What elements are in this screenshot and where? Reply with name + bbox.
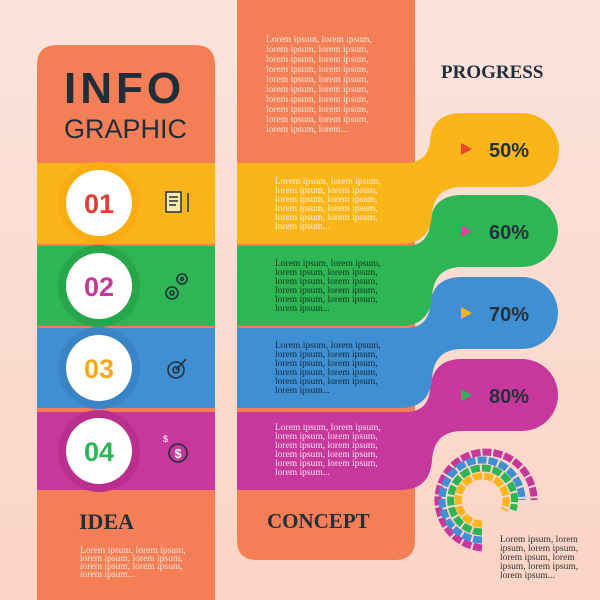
band: yellow 01: [37, 113, 559, 244]
band: blue 03: lorem ipsum, lorem ipsum,: [275, 350, 378, 360]
text block: idea: lorem ipsum...: [80, 570, 135, 580]
band: green 02: lorem ipsum, lorem ipsum,: [275, 286, 378, 296]
text block: chart caption: ipsum, lorem ipsum,: [500, 562, 578, 572]
heading: CONCEPT: CONCEPT: [267, 509, 370, 533]
icon: dollar coin: [163, 434, 187, 462]
band: yellow 01: lorem ipsum, lorem ipsum,: [275, 195, 378, 205]
band: blue 03: lorem ipsum, lorem ipsum,: [275, 368, 378, 378]
band: green 02: lorem ipsum, lorem ipsum,: [275, 277, 378, 287]
text block: concept top: lorem ipsum, lorem ipsum,: [266, 95, 369, 105]
band: purple 04: 80%: [489, 386, 529, 408]
text block: concept top: lorem ipsum, lorem ipsum,: [266, 115, 369, 125]
badge: 03: [58, 327, 140, 409]
band: yellow 01: 50%: [489, 140, 529, 162]
band: green 02: [37, 195, 558, 326]
band: green 02: 60%: [489, 222, 529, 244]
badge: 03: 03: [84, 354, 114, 384]
panel: left idea column: [37, 45, 215, 600]
band: blue 03: lorem ipsum, lorem ipsum,: [275, 377, 378, 387]
text block: chart caption: lorem ipsum, lorem: [500, 553, 575, 563]
band: purple 04: lorem ipsum, lorem ipsum,: [275, 441, 378, 451]
badge: 01: [58, 162, 140, 244]
text block: concept top: lorem ipsum, lorem ipsum,: [266, 105, 369, 115]
band: purple 04: lorem ipsum...: [275, 468, 330, 478]
band: blue 03: lorem ipsum, lorem ipsum,: [275, 359, 378, 369]
text block: concept top: lorem ipsum, lorem...: [266, 125, 348, 135]
band: blue 03: 70%: [489, 304, 529, 326]
band: green 02: lorem ipsum...: [275, 304, 330, 314]
band: yellow 01: lorem ipsum, lorem ipsum,: [275, 186, 378, 196]
icon: dollar coin: $: [163, 434, 168, 444]
title: INFO GRAPHIC: [64, 64, 187, 144]
band: green 02: lorem ipsum, lorem ipsum,: [275, 295, 378, 305]
band: yellow 01: lorem ipsum, lorem ipsum,: [275, 213, 378, 223]
band: blue 03: [37, 277, 558, 408]
badge: 04: [58, 410, 140, 492]
icon: gears: [166, 274, 187, 299]
band: purple 04: Lorem ipsum, lorem ipsum,: [275, 423, 381, 433]
text block: chart caption: Lorem ipsum, lorem: [500, 535, 578, 545]
text block: idea: lorem ipsum, lorem ipsum,: [80, 554, 183, 564]
chart: radial progress: [438, 452, 534, 548]
band: blue 03: lorem ipsum...: [275, 386, 330, 396]
text block: concept top: Lorem ipsum, lorem ipsum,: [266, 35, 372, 45]
title: INFO GRAPHIC: INFO: [64, 64, 185, 113]
band: green 02: lorem ipsum, lorem ipsum,: [275, 268, 378, 278]
band: blue 03: Lorem ipsum, lorem ipsum,: [275, 341, 381, 351]
text block: idea: lorem ipsum, lorem ipsum,: [80, 562, 183, 572]
text block: concept top: lorem ipsum, lorem ipsum,: [266, 75, 369, 85]
badge: 04: 04: [84, 437, 114, 467]
title: INFO GRAPHIC: GRAPHIC: [64, 114, 187, 144]
icon: dollar coin: $: [174, 446, 182, 461]
icon: target: [168, 359, 186, 378]
text block: concept top: lorem ipsum, lorem ipsum,: [266, 55, 369, 65]
badge: 02: [58, 245, 140, 327]
icon: document: [166, 192, 188, 212]
band: purple 04: lorem ipsum, lorem ipsum,: [275, 450, 378, 460]
text block: concept top: lorem ipsum, lorem ipsum,: [266, 45, 369, 55]
badge: 01: 01: [84, 189, 114, 219]
text block: chart caption: lorem ipsum...: [500, 571, 555, 581]
panel: middle concept column: [237, 0, 415, 560]
band: green 02: Lorem ipsum, lorem ipsum,: [275, 259, 381, 269]
text block: concept top: lorem ipsum, lorem ipsum,: [266, 85, 369, 95]
band: purple 04: lorem ipsum, lorem ipsum,: [275, 459, 378, 469]
heading: IDEA: IDEA: [79, 509, 134, 534]
text block: idea: Lorem ipsum, lorem ipsum,: [80, 546, 186, 556]
heading: PROGRESS: PROGRESS: [441, 62, 543, 83]
band: purple 04: [37, 359, 558, 490]
band: purple 04: lorem ipsum, lorem ipsum,: [275, 432, 378, 442]
band: yellow 01: Lorem ipsum, lorem ipsum,: [275, 177, 381, 187]
text block: concept top: lorem ipsum, lorem ipsum,: [266, 65, 369, 75]
text block: chart caption: ipsum, lorem ipsum,: [500, 544, 578, 554]
badge: 02: 02: [84, 272, 114, 302]
band: yellow 01: lorem ipsum...: [275, 222, 330, 232]
band: yellow 01: lorem ipsum, lorem ipsum,: [275, 204, 378, 214]
